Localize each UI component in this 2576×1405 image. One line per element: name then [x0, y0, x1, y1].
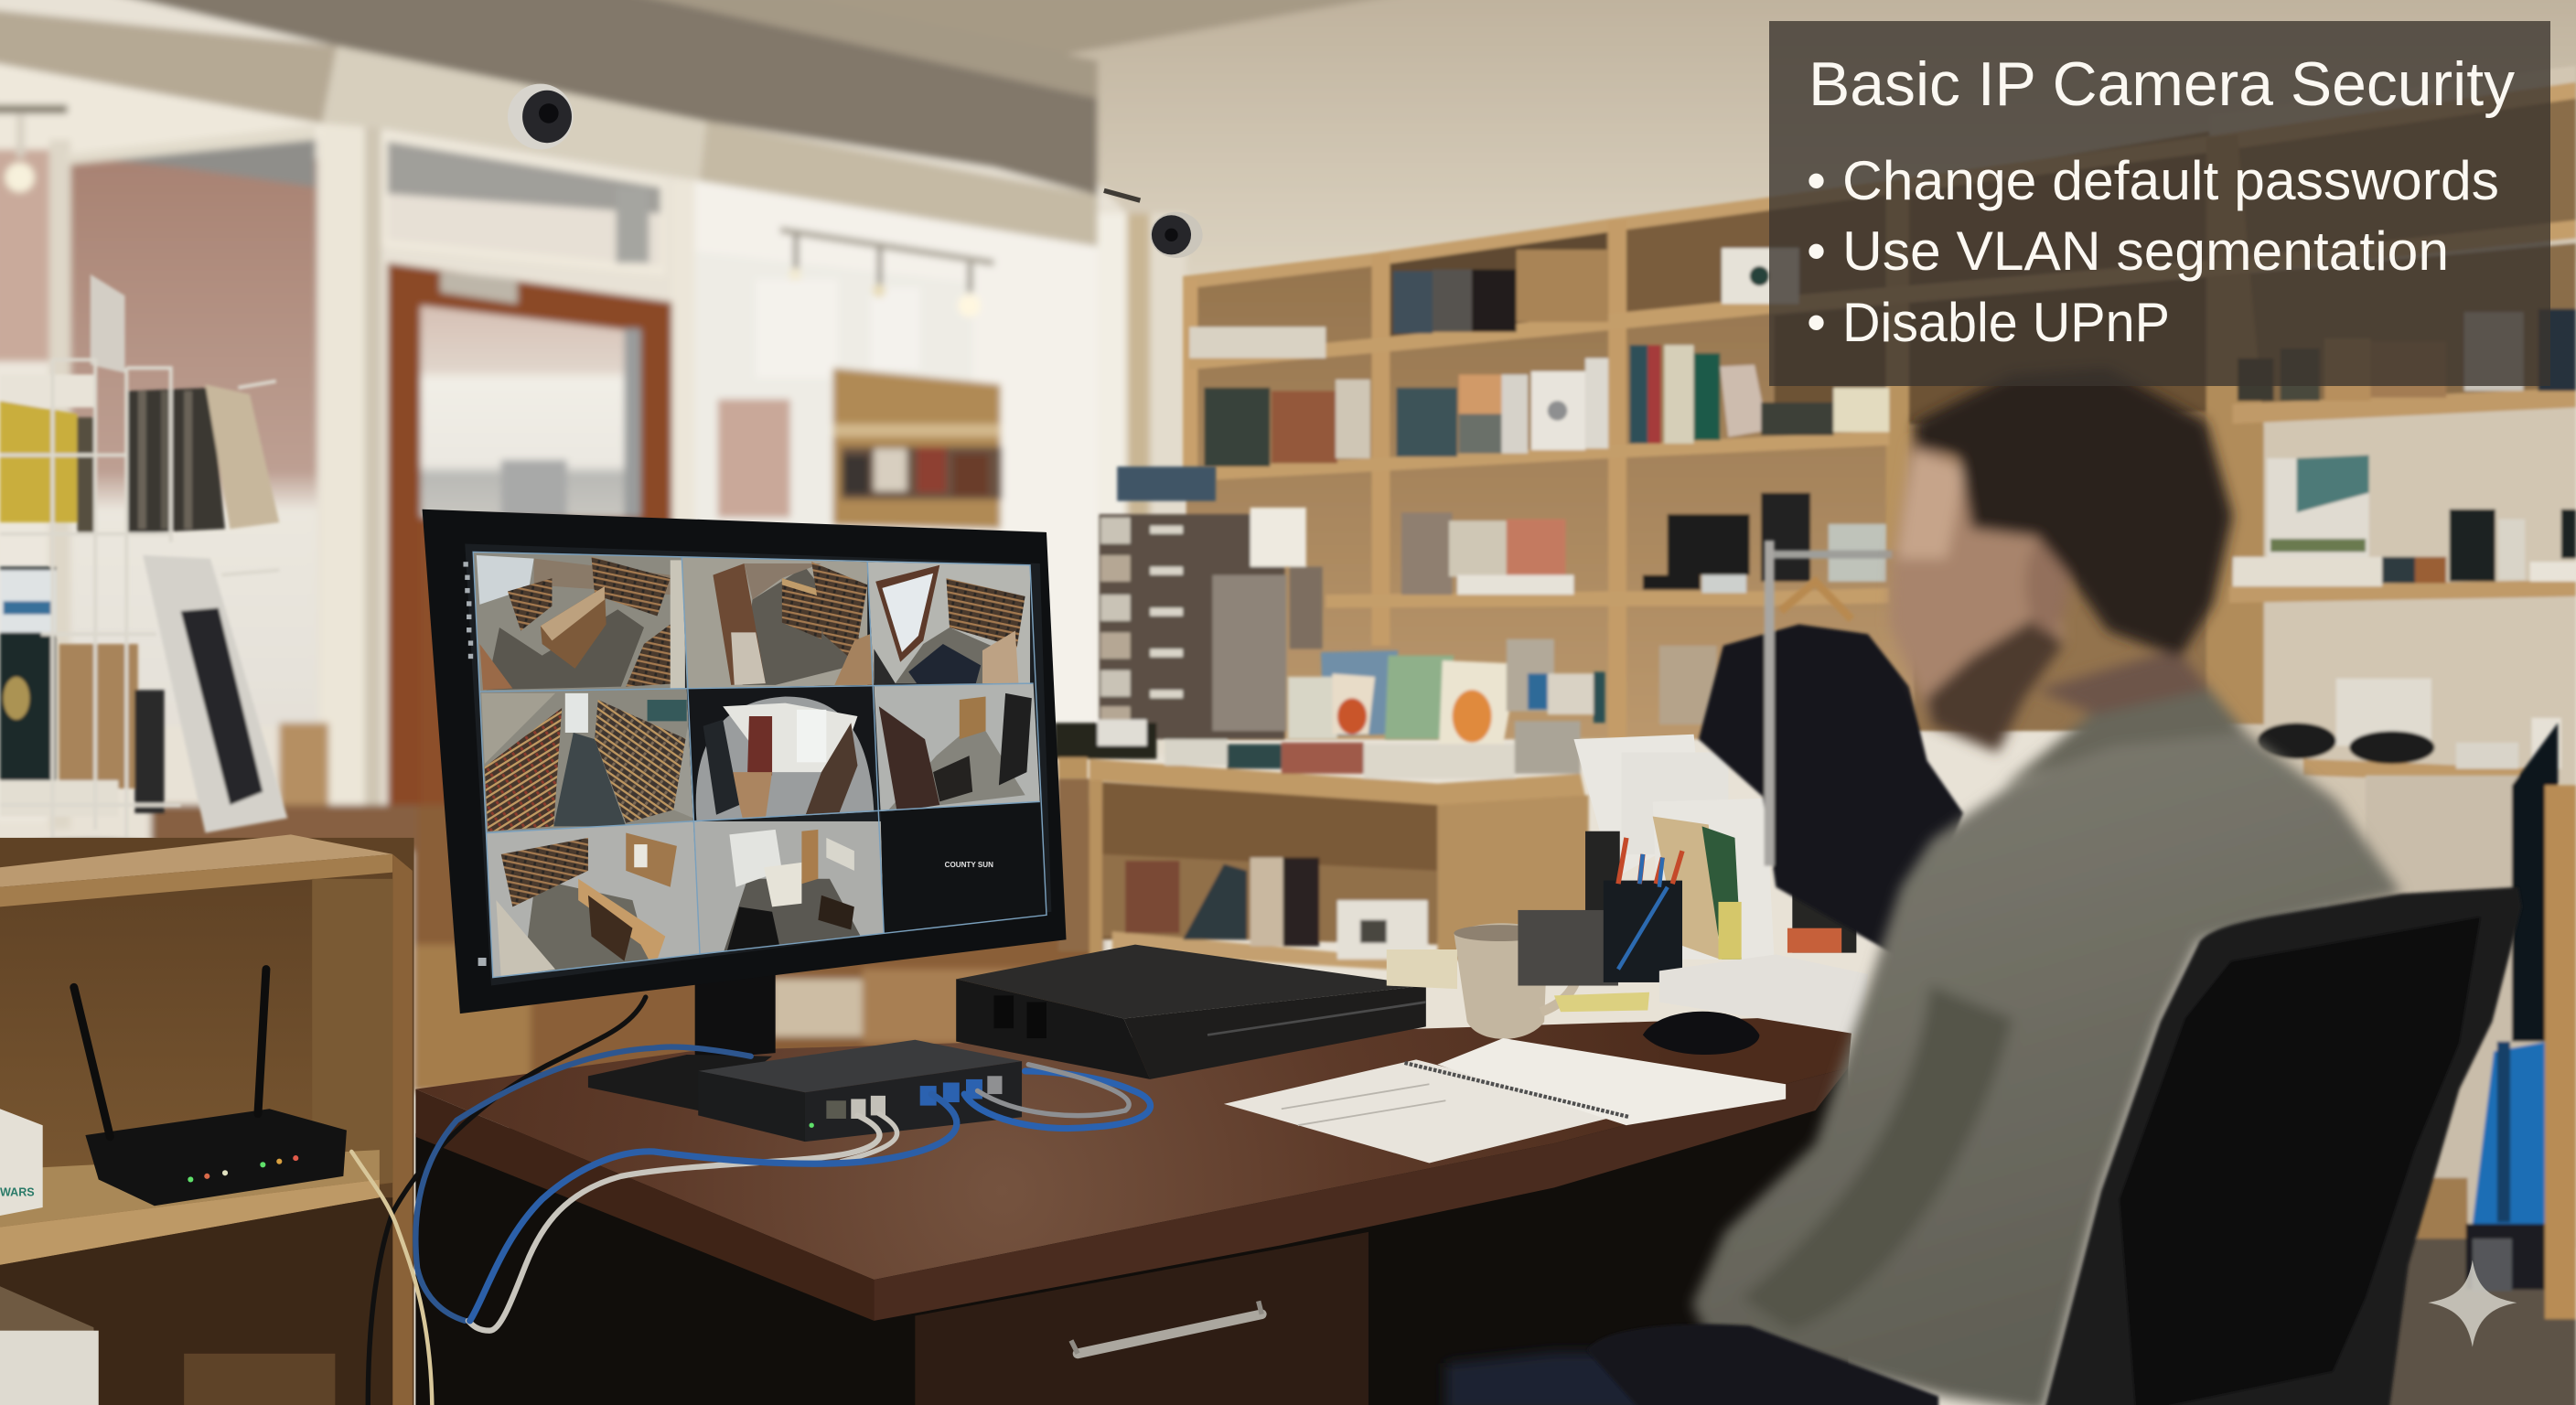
blue cable from monitor — [415, 1046, 751, 1321]
back papers — [1573, 735, 1702, 879]
camera tile 4 — [479, 688, 693, 833]
icon: ceiling dome camera left — [508, 84, 574, 149]
pillar right — [1098, 213, 1127, 756]
compartments shade — [1390, 230, 1606, 342]
monitor — [423, 509, 1067, 1110]
camera tile 6 — [874, 683, 1040, 811]
bullet list: • — [1807, 150, 1826, 211]
wood display — [833, 368, 1001, 529]
bullet list: • — [1807, 220, 1826, 282]
shelf row 2 items — [1204, 388, 1270, 467]
right blue loop — [964, 1071, 1151, 1129]
brochure cluster — [124, 388, 225, 534]
sign on rack — [1117, 467, 1216, 501]
right shelf items (upper) — [2238, 359, 2274, 401]
monitor stand — [695, 970, 776, 1059]
bullet list — [1807, 150, 2499, 353]
office chair — [1587, 887, 2522, 1405]
cabinet side — [392, 854, 413, 1405]
books on counter — [1321, 650, 1398, 736]
screen top bar text: DVR SYSTEM LIVE VIEW — [508, 555, 574, 562]
shelf frame — [1183, 82, 2576, 289]
grey cable from switch — [468, 1115, 879, 1331]
shelf back panels — [1186, 184, 1914, 739]
left header band — [0, 10, 381, 128]
clothes rack with jacket — [1699, 541, 1963, 961]
upper wall right — [986, 0, 2576, 279]
camera tile 7 — [487, 821, 700, 978]
door frame — [388, 263, 673, 821]
shelf row 3 items — [1401, 512, 1453, 595]
counter — [1058, 757, 1088, 778]
desk top — [415, 1015, 1853, 1280]
left window brick view — [70, 159, 317, 726]
pen cup — [1604, 881, 1682, 982]
sidebar icons — [463, 562, 487, 966]
cabinet interior — [0, 867, 392, 1232]
sign on rack — [91, 274, 124, 373]
icon: sparkle watermark — [2428, 1260, 2517, 1347]
poster — [718, 399, 790, 518]
grid lines — [473, 552, 1046, 978]
camera tile 8 — [693, 821, 884, 954]
mesh holder — [1518, 910, 1618, 986]
shelf row 1 items — [1189, 327, 1326, 359]
sticky note and mouse — [1554, 992, 1759, 1055]
postcard rack — [1099, 514, 1284, 739]
trousers — [1445, 1352, 1873, 1405]
empty camera tile — [881, 801, 1046, 933]
network cables — [351, 997, 1151, 1404]
collar — [2004, 685, 2246, 785]
box on cabinet shelf — [0, 1109, 43, 1216]
white card on rack — [0, 374, 95, 407]
transom — [381, 132, 665, 276]
desk paper stacks and pen cup — [1387, 735, 1868, 1035]
cabinet top — [0, 834, 392, 887]
beam over window — [700, 122, 1098, 246]
neck — [2037, 649, 2209, 714]
lower bay — [0, 1197, 392, 1405]
open notebook — [1224, 1038, 1786, 1163]
shelf — [0, 1150, 380, 1228]
camera tile 1 — [473, 552, 685, 692]
track light left — [0, 105, 68, 113]
desk items right — [1792, 884, 1856, 953]
track lights — [780, 227, 994, 266]
bullet list: Disable UPnP — [1842, 292, 2170, 353]
column — [322, 123, 381, 821]
door header — [322, 46, 706, 181]
hair — [1916, 368, 2233, 657]
cream cable — [351, 1152, 432, 1404]
right edge: floor, blue bag, shelf side — [2366, 723, 2576, 1405]
monitor power cable — [368, 997, 646, 1404]
camera tile 3 — [867, 562, 1030, 685]
icon: wifi router — [74, 970, 347, 1206]
network switch — [698, 1040, 1022, 1142]
paper stack on desk — [1659, 954, 1868, 1035]
monitor base — [588, 1055, 772, 1110]
folder — [1653, 799, 1775, 960]
wire frame — [0, 359, 279, 842]
ceiling strip — [0, 0, 1412, 167]
box on lower shelf — [0, 1286, 99, 1405]
box on cabinet shelf: WARS — [0, 1185, 35, 1198]
yellow brochure — [0, 401, 77, 522]
under desk darkness — [415, 1051, 1848, 1405]
desk — [415, 1015, 1853, 1405]
lower area behind desk — [413, 805, 1102, 1092]
blue cable from switch — [470, 1094, 957, 1321]
drawer — [915, 1232, 1368, 1405]
heading: Basic IP Camera Security — [1809, 49, 2515, 119]
network video recorder — [956, 945, 1426, 1079]
white soffit over left window — [0, 62, 322, 159]
background: bookshelf wall — [1183, 66, 2576, 1249]
right window — [695, 181, 1098, 788]
desk edge — [415, 1089, 874, 1321]
bullet list: Use VLAN segmentation — [1842, 220, 2449, 282]
wire rack with brochures — [0, 274, 287, 863]
black organizer — [1585, 831, 1620, 914]
lower bay magazine — [1659, 646, 1717, 724]
camera tile 5 — [687, 685, 874, 821]
bullet list: Change default passwords — [1842, 150, 2499, 211]
camera tile 2 — [682, 557, 874, 688]
beard — [1926, 616, 2064, 753]
card rack and counter with books — [1055, 467, 1605, 972]
tile caption text: COUNTY SUN — [945, 861, 993, 869]
left wooden cabinet — [0, 834, 414, 1405]
bullet list: • — [1807, 292, 1826, 353]
callout panel: Basic IP Camera Security — [1769, 21, 2550, 386]
icon: ceiling dome camera right — [1104, 190, 1203, 258]
man seated at desk — [1445, 368, 2402, 1405]
monitor bezel — [423, 509, 1067, 1014]
dark beam band — [105, 0, 1098, 196]
coffee mug — [1454, 923, 1577, 1039]
shirt — [1692, 733, 2402, 1405]
dark card — [0, 567, 56, 788]
face — [1889, 442, 2064, 753]
lower card pack — [143, 555, 287, 833]
